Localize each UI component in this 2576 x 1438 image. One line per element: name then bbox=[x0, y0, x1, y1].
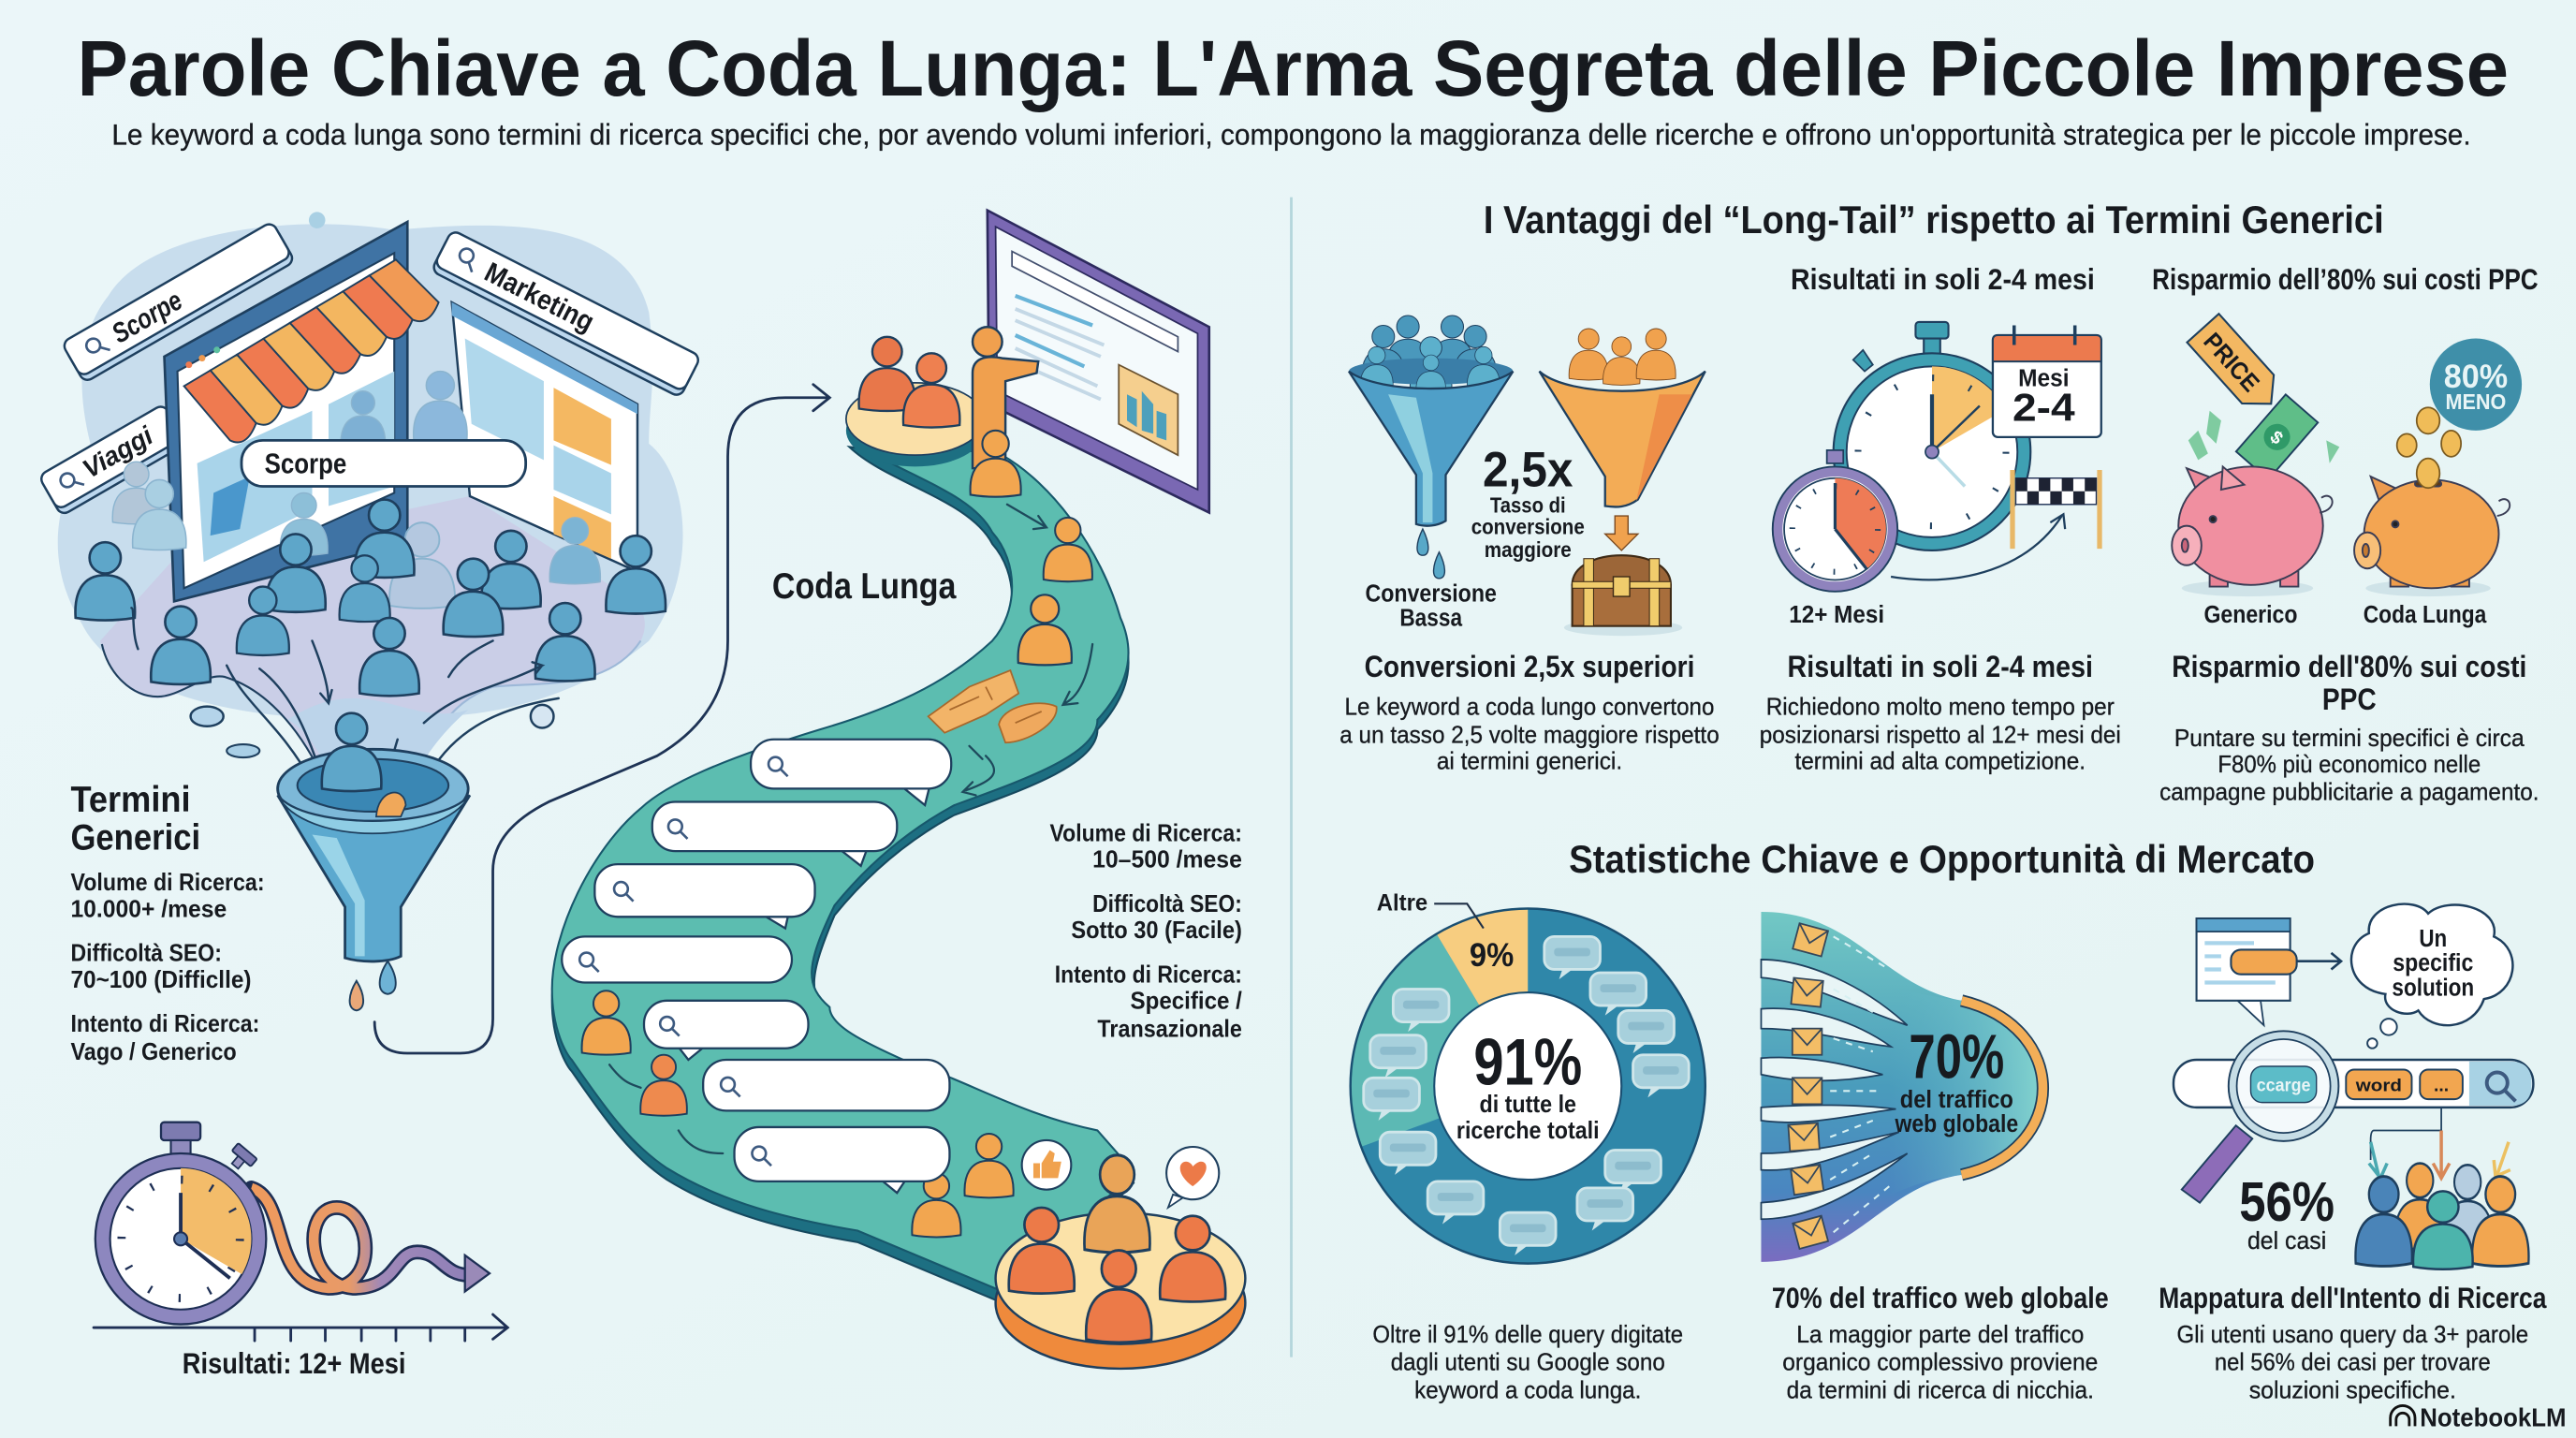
text block: long tail stats bbox=[1050, 821, 1242, 1042]
finish flag bbox=[2012, 470, 2100, 549]
title: Parole Chiave a Coda Lunga: L'Arma Segreta delle Piccole Imprese bbox=[77, 24, 2509, 112]
text block: generic terms: Generici bbox=[70, 817, 200, 858]
people on the road bbox=[582, 518, 1092, 1237]
road direction arrows bbox=[609, 505, 1092, 1153]
flow diagram: 70% traffic bbox=[1761, 912, 2042, 1262]
label: 56% bbox=[2239, 1170, 2334, 1255]
green banknote bbox=[2236, 394, 2318, 479]
pink pig bbox=[2172, 466, 2333, 596]
reaction bubble: heart bbox=[1166, 1147, 1219, 1208]
reaction bubble: thumbs up bbox=[1022, 1140, 1071, 1190]
orange chips on road bbox=[929, 670, 1057, 742]
badge: 80% less: 80% bbox=[2444, 359, 2508, 395]
text block: generic terms: 10.000+ /mese bbox=[70, 896, 227, 922]
stopwatch: slow results bbox=[95, 1123, 490, 1325]
label: conversion rate: Tasso di bbox=[1490, 493, 1566, 518]
query search bar bbox=[2174, 1060, 2533, 1108]
text block: generic terms: Termini bbox=[70, 780, 191, 820]
card text: results: posizionarsi rispetto al 12+ mesi dei bbox=[1760, 722, 2121, 748]
funnel: generic terms bbox=[278, 713, 470, 1010]
label: 70%: web globale bbox=[1895, 1109, 2018, 1137]
browser window bbox=[2197, 918, 2297, 1025]
monitor: long-tail search results bbox=[988, 211, 1209, 513]
card text: 70%: organico complessivo proviene bbox=[1782, 1350, 2098, 1376]
label: low conversion: Conversione bbox=[1365, 579, 1497, 607]
label: conversion rate: maggiore bbox=[1485, 537, 1572, 562]
search bar: Viaggi: Viaggi bbox=[78, 420, 158, 484]
card text: savings: PPC bbox=[2322, 682, 2377, 716]
gaps between streams bbox=[1761, 960, 1908, 1219]
white speed dashes bbox=[1830, 936, 1889, 1232]
label: long tail: Coda Lunga bbox=[772, 566, 957, 607]
diagram: search intent mapping bbox=[2174, 904, 2533, 1269]
results browser panel bbox=[452, 302, 637, 572]
label: conversion rate: conversione bbox=[1471, 514, 1585, 538]
query search bar: word bbox=[2355, 1075, 2402, 1094]
intent arrows bbox=[2369, 1108, 2510, 1178]
central search bar bbox=[242, 440, 526, 486]
card text: 70%: da termini di ricerca di nicchia. bbox=[1787, 1378, 2094, 1404]
coins bbox=[2397, 407, 2461, 488]
ribbon arrow bbox=[252, 1188, 468, 1288]
logo: NotebookLM: NotebookLM bbox=[2420, 1402, 2566, 1431]
label: generic: Generico bbox=[2203, 600, 2298, 628]
striped shop awning bbox=[184, 259, 439, 442]
label: 70% bbox=[1895, 1022, 2018, 1137]
calendar: 2-4 bbox=[2012, 385, 2075, 429]
icon: clocks and calendar bbox=[1773, 322, 2101, 592]
thought cloud bbox=[2351, 904, 2512, 1049]
arrow to cloud bbox=[2297, 953, 2341, 969]
text block: generic terms: Volume di Ricerca: bbox=[70, 870, 265, 896]
card text: conversions: ai termini generici. bbox=[1437, 748, 1622, 774]
search bar: Marketing: Marketing bbox=[479, 257, 599, 338]
price tag bbox=[2188, 314, 2287, 418]
badge: 80% less: MENO bbox=[2445, 389, 2506, 414]
text block: long tail stats: Specifice / bbox=[1131, 989, 1242, 1015]
label: long tail pig: Coda Lunga bbox=[2364, 600, 2487, 628]
progress arrow bbox=[1891, 514, 2065, 580]
card text: 91% bbox=[1372, 1322, 1683, 1404]
card text: 70% bbox=[1772, 1281, 2109, 1404]
card text: search intent: Gli utenti usano query da 3+ parole bbox=[2177, 1322, 2528, 1348]
icon: treasure chest bbox=[1564, 555, 1682, 636]
thought cloud: specific bbox=[2393, 948, 2473, 976]
text block: generic terms: Difficoltà SEO: bbox=[70, 941, 222, 967]
card text: conversions bbox=[1339, 650, 1720, 774]
platform: top long-tail audience bbox=[846, 327, 1038, 497]
text block: long tail stats: Transazionale bbox=[1097, 1016, 1242, 1042]
card text: search intent: nel 56% dei casi per trovare bbox=[2215, 1350, 2491, 1376]
card text: 91%: dagli utenti su Google sono bbox=[1391, 1350, 1665, 1376]
card text: conversions: Le keyword a coda lungo convertono bbox=[1345, 694, 1714, 720]
label: conversion rate: 2,5x bbox=[1483, 442, 1573, 497]
platform: bottom long-tail audience bbox=[996, 1140, 1245, 1369]
timeline axis bbox=[94, 1314, 507, 1341]
subheading: results: Risultati in soli 2-4 mesi bbox=[1791, 262, 2095, 296]
search bar: Marketing bbox=[432, 229, 701, 398]
target audience group bbox=[2355, 1164, 2528, 1269]
label: 70%: 70% bbox=[1909, 1022, 2004, 1092]
arrow: connector from funnel to long tail bbox=[374, 385, 829, 1053]
label: low conversion: Bassa bbox=[1399, 604, 1462, 632]
long-tail winding road bbox=[552, 435, 1134, 1306]
label: 91% center: di tutte le bbox=[1479, 1092, 1576, 1118]
arrow into chest bbox=[1605, 516, 1638, 550]
envelopes bbox=[1788, 923, 1828, 1249]
label: 91% center: 91% bbox=[1473, 1024, 1582, 1098]
card text: conversions: a un tasso 2,5 volte maggiore rispetto bbox=[1339, 722, 1720, 748]
price tag: PRICE bbox=[2198, 327, 2265, 397]
text block: generic terms: Vago / Generico bbox=[70, 1039, 237, 1065]
label: conversion rate bbox=[1471, 442, 1585, 562]
section heading: statistics: Statistiche Chiave e Opportunità di Mercato bbox=[1569, 837, 2315, 881]
card text: savings: campagne pubblicitarie a pagamento. bbox=[2159, 780, 2539, 806]
text block: generic terms bbox=[70, 780, 265, 1065]
icon: piggy banks bbox=[2172, 314, 2522, 596]
thought cloud: solution bbox=[2392, 974, 2474, 1002]
large clock bbox=[1834, 322, 2030, 550]
card text: results bbox=[1760, 650, 2121, 774]
text block: long tail stats: Volume di Ricerca: bbox=[1050, 821, 1242, 847]
label: others callout bbox=[1377, 890, 1484, 929]
subtitle: Le keyword a coda lunga sono termini di ricerca specifici che, por avendo volumi inferiori, compongono la maggioranza delle ricerche e offrono un'opportunità strategica per le piccole imprese. bbox=[111, 117, 2471, 151]
label: slow results: Risultati: 12+ Mesi bbox=[183, 1346, 406, 1380]
crowd of generic searchers bbox=[76, 500, 666, 696]
chat bubbles in ring bbox=[1364, 936, 1689, 1255]
badge: 80% less bbox=[2430, 339, 2522, 431]
label: 56%: del casi bbox=[2247, 1226, 2326, 1255]
magnifying glass bbox=[2182, 1031, 2338, 1203]
card text: search intent: soluzioni specifiche. bbox=[2249, 1378, 2456, 1404]
card text: 91%: Oltre il 91% delle query digitate bbox=[1372, 1322, 1683, 1348]
calendar bbox=[1993, 325, 2101, 437]
magnifying glass: ccarge bbox=[2257, 1076, 2311, 1095]
label: 9%: 9% bbox=[1470, 937, 1514, 974]
card text: 91%: keyword a coda lunga. bbox=[1414, 1378, 1641, 1404]
text block: long tail stats: Intento di Ricerca: bbox=[1055, 962, 1242, 989]
card text: results: termini ad alta competizione. bbox=[1794, 748, 2086, 774]
label: others callout: Altre bbox=[1377, 890, 1427, 916]
search bubbles on road bbox=[562, 740, 951, 1193]
label: 12+ months: 12+ Mesi bbox=[1789, 600, 1884, 628]
card text: savings bbox=[2159, 650, 2539, 806]
faded people behind crowd bbox=[112, 372, 600, 609]
card text: 70%: La maggior parte del traffico bbox=[1796, 1322, 2084, 1348]
drops bbox=[350, 961, 396, 1010]
donut chart: 91% long tail bbox=[1351, 909, 1705, 1264]
green banknote: $ bbox=[2266, 428, 2287, 449]
store browser window bbox=[165, 222, 407, 601]
orange pig bbox=[2354, 477, 2510, 596]
illustration: generic terms crowd bbox=[38, 212, 701, 788]
card text: savings: Risparmio dell'80% sui costi bbox=[2172, 650, 2526, 683]
orange funnel bbox=[1540, 329, 1705, 506]
flow arrows bbox=[131, 608, 559, 788]
label: 91% center: ricerche totali bbox=[1456, 1118, 1600, 1144]
card text: savings: Puntare su termini specifici è circa bbox=[2174, 726, 2525, 752]
search bar: Scorpe bbox=[62, 221, 295, 383]
query search bar: ... bbox=[2434, 1076, 2449, 1095]
search bar: Viaggi bbox=[38, 404, 186, 516]
label: 56%: 56% bbox=[2239, 1170, 2334, 1233]
card text: conversions: Conversioni 2,5x superiori bbox=[1365, 650, 1694, 683]
search bar: Scorpe: Scorpe bbox=[107, 285, 187, 349]
orange arc bbox=[1962, 1001, 2042, 1175]
label: 70%: del traffico bbox=[1900, 1085, 2013, 1113]
text block: long tail stats: Sotto 30 (Facile) bbox=[1071, 917, 1242, 944]
thought cloud: Un bbox=[2419, 924, 2447, 952]
small stopwatch bbox=[1773, 450, 1897, 592]
text block: generic terms: Intento di Ricerca: bbox=[70, 1011, 259, 1037]
text block: generic terms: 70~100 (Difficlle) bbox=[70, 967, 252, 993]
blue funnel bbox=[1349, 315, 1513, 579]
label: 91% center bbox=[1456, 1024, 1600, 1144]
calendar: Mesi bbox=[2018, 363, 2070, 391]
card text: savings: F80% più economico nelle bbox=[2217, 752, 2481, 778]
card text: search intent bbox=[2159, 1281, 2547, 1404]
text block: long tail stats: Difficoltà SEO: bbox=[1092, 891, 1242, 917]
text block: long tail stats: 10–500 /mese bbox=[1092, 847, 1242, 873]
card text: results: Risultati in soli 2-4 mesi bbox=[1788, 650, 2093, 683]
central search bar: Scorpe bbox=[265, 447, 346, 479]
label: low conversion bbox=[1365, 579, 1497, 632]
card text: results: Richiedono molto meno tempo per bbox=[1766, 694, 2115, 720]
card text: 70%: 70% del traffico web globale bbox=[1772, 1281, 2109, 1314]
section heading: advantages: I Vantaggi del “Long-Tail” rispetto ai Termini Generici bbox=[1484, 198, 2384, 242]
icon: conversion funnels bbox=[1349, 315, 1705, 636]
